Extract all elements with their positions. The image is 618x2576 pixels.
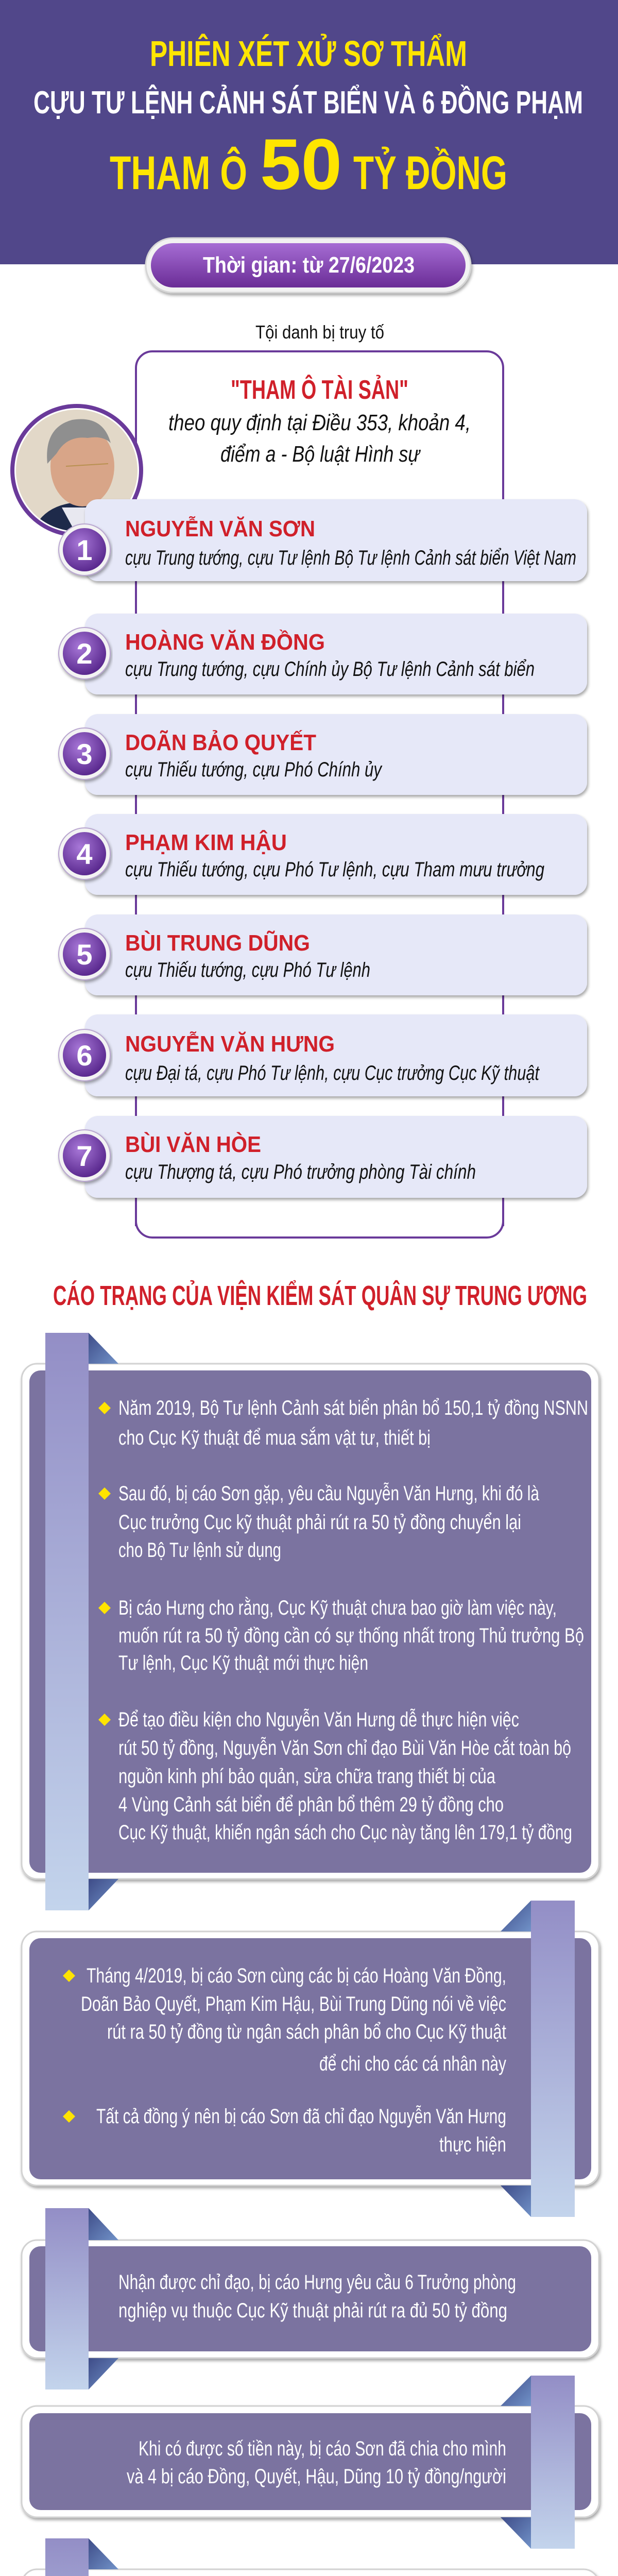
card 1 (59, 499, 587, 581)
charge text: theo quy định tại Điều 353, khoản 4, (168, 410, 471, 435)
icon: portrait photo (10, 402, 144, 536)
panel 1: allocation and withdrawal: cho Cục Kỹ thuật để mua sắm vật tư, thiết bị (118, 1426, 431, 1449)
card 1: NGUYỄN VĂN SƠN (125, 516, 315, 541)
card 5: 5 (76, 938, 93, 971)
card 7: BÙI VĂN HÒE (125, 1131, 261, 1157)
card 4: PHẠM KIM HẬU (125, 829, 287, 855)
charge box frame (136, 351, 503, 1238)
card 7: 7 (76, 1140, 93, 1172)
charge text (168, 375, 471, 467)
panel 1: allocation and withdrawal: nguồn kinh phí bảo quản, sửa chữa trang thiết bị của (118, 1765, 496, 1788)
title: TỶ ĐỒNG (353, 146, 507, 199)
card 6: 6 (76, 1039, 93, 1072)
card 3: cựu Thiếu tướng, cựu Phó Chính ủy (125, 758, 383, 781)
title (33, 33, 583, 205)
panel 4: money split (22, 2376, 599, 2549)
card 5: BÙI TRUNG DŨNG (125, 930, 310, 956)
panel 4: money split: Khi có được số tiền này, bị cáo Sơn đã chia cho mình (139, 2437, 506, 2460)
panel 1: allocation and withdrawal: Tư lệnh, Cục Kỹ thuật mới thực hiện (118, 1652, 368, 1674)
card 7: cựu Thượng tá, cựu Phó trưởng phòng Tài chính (125, 1161, 476, 1183)
panel 3: Hung's request (22, 2208, 599, 2389)
panel 2: April 2019 meeting: thực hiện (439, 2133, 506, 2156)
panel 1: allocation and withdrawal (22, 1333, 599, 1910)
card 6 (59, 1014, 587, 1096)
panel 2: April 2019 meeting: rút ra 50 tỷ đồng từ ngân sách phân bổ cho Cục Kỹ thuật (107, 2021, 506, 2043)
card 7 (59, 1116, 587, 1198)
card 4 (59, 814, 587, 895)
card 4: 4 (76, 838, 93, 870)
panel 3: Hung's request: nghiệp vụ thuộc Cục Kỹ thuật phải rút ra đủ 50 tỷ đồng (118, 2299, 507, 2322)
title: THAM Ô (110, 146, 247, 199)
card 3: 3 (76, 738, 93, 770)
charge text: "THAM Ô TÀI SẢN" (231, 375, 408, 405)
connector lines (136, 581, 503, 1226)
title: 50 (260, 124, 342, 205)
card 1: 1 (76, 534, 93, 566)
card 2: HOÀNG VĂN ĐỒNG (125, 629, 325, 655)
card 6: NGUYỄN VĂN HƯNG (125, 1031, 335, 1057)
panel 2: April 2019 meeting (22, 1901, 599, 2217)
card 5: cựu Thiếu tướng, cựu Phó Tư lệnh (125, 959, 370, 981)
panel 1: allocation and withdrawal: cho Bộ Tư lệnh sử dụng (118, 1539, 281, 1562)
panel 2: April 2019 meeting: để chi cho các cá nhân này (319, 2053, 506, 2075)
date pill (146, 238, 471, 293)
card 3: DOÃN BẢO QUYẾT (125, 730, 316, 755)
card 3 (59, 714, 587, 795)
card 5 (59, 914, 587, 995)
date pill: Thời gian: từ 27/6/2023 (203, 252, 415, 278)
header background (0, 0, 618, 264)
card 2 (59, 614, 587, 694)
card 2: 2 (76, 637, 93, 670)
title: PHIÊN XÉT XỬ SƠ THẨM (150, 33, 467, 74)
charge label: Tội danh bị truy tố (255, 321, 384, 343)
panel 1: allocation and withdrawal: 4 Vùng Cảnh sát biển để phân bổ thêm 29 tỷ đồng cho (118, 1793, 504, 1816)
panel 5: Pham Kim Hau petition (22, 2538, 599, 2576)
charge text: điểm a - Bộ luật Hình sự (220, 442, 421, 467)
panel 4: money split: và 4 bị cáo Đồng, Quyết, Hậu, Dũng 10 tỷ đồng/người (127, 2465, 506, 2488)
